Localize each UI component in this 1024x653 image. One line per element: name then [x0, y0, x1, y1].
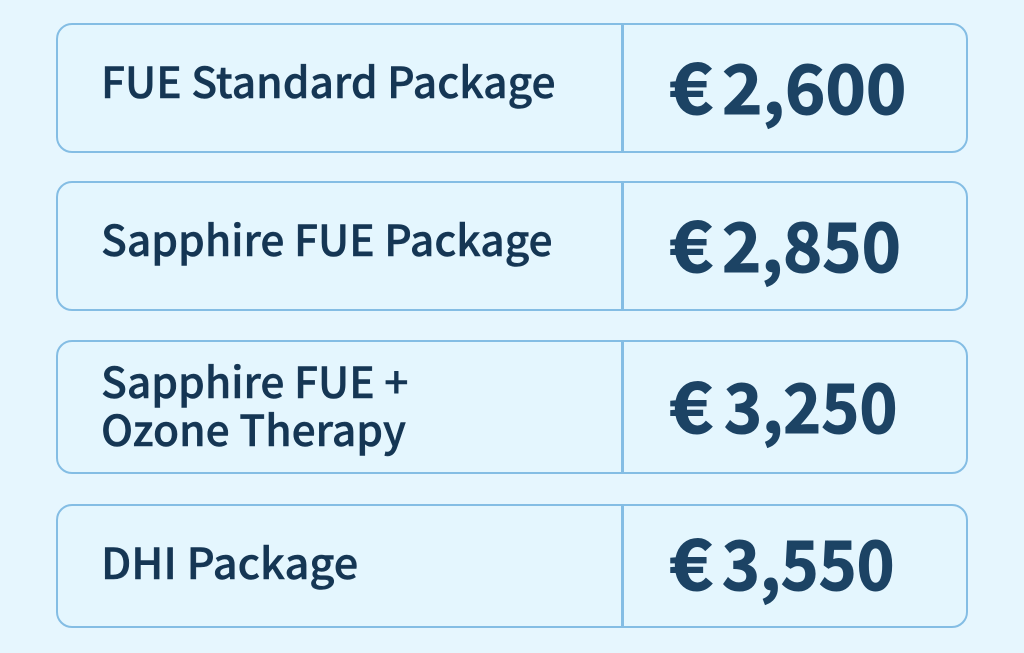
price: 2,600 euro: 2,600: [722, 35, 906, 134]
price: 2,600 euro: €: [669, 34, 713, 135]
price: 2,850 euro: 2,850: [722, 193, 901, 292]
label: Sapphire FUE Package: Sapphire FUE Package: [101, 208, 553, 269]
label: DHI Package: DHI Package: [101, 531, 358, 592]
panel: FUE Standard Package row: [56, 23, 968, 153]
price: 3,550 euro: €: [669, 510, 713, 611]
price: 3,250 euro: 3,250: [724, 354, 897, 453]
label: Sapphire FUE + Ozone Therapy: Ozone Therapy: [101, 398, 406, 459]
panel: DHI Package row: [56, 504, 968, 628]
price: 3,250 euro: €: [669, 353, 713, 454]
panel: Sapphire FUE Package row: [56, 181, 968, 311]
panel: Sapphire FUE + Ozone Therapy row: [56, 340, 968, 474]
price: 2,850 euro: €: [669, 192, 713, 293]
label: FUE Standard Package: FUE Standard Package: [101, 50, 556, 111]
price: 3,550 euro: 3,550: [722, 511, 895, 610]
label: Sapphire FUE + Ozone Therapy: Sapphire FUE +: [101, 350, 408, 411]
label: Sapphire FUE + Ozone Therapy: [101, 350, 408, 459]
